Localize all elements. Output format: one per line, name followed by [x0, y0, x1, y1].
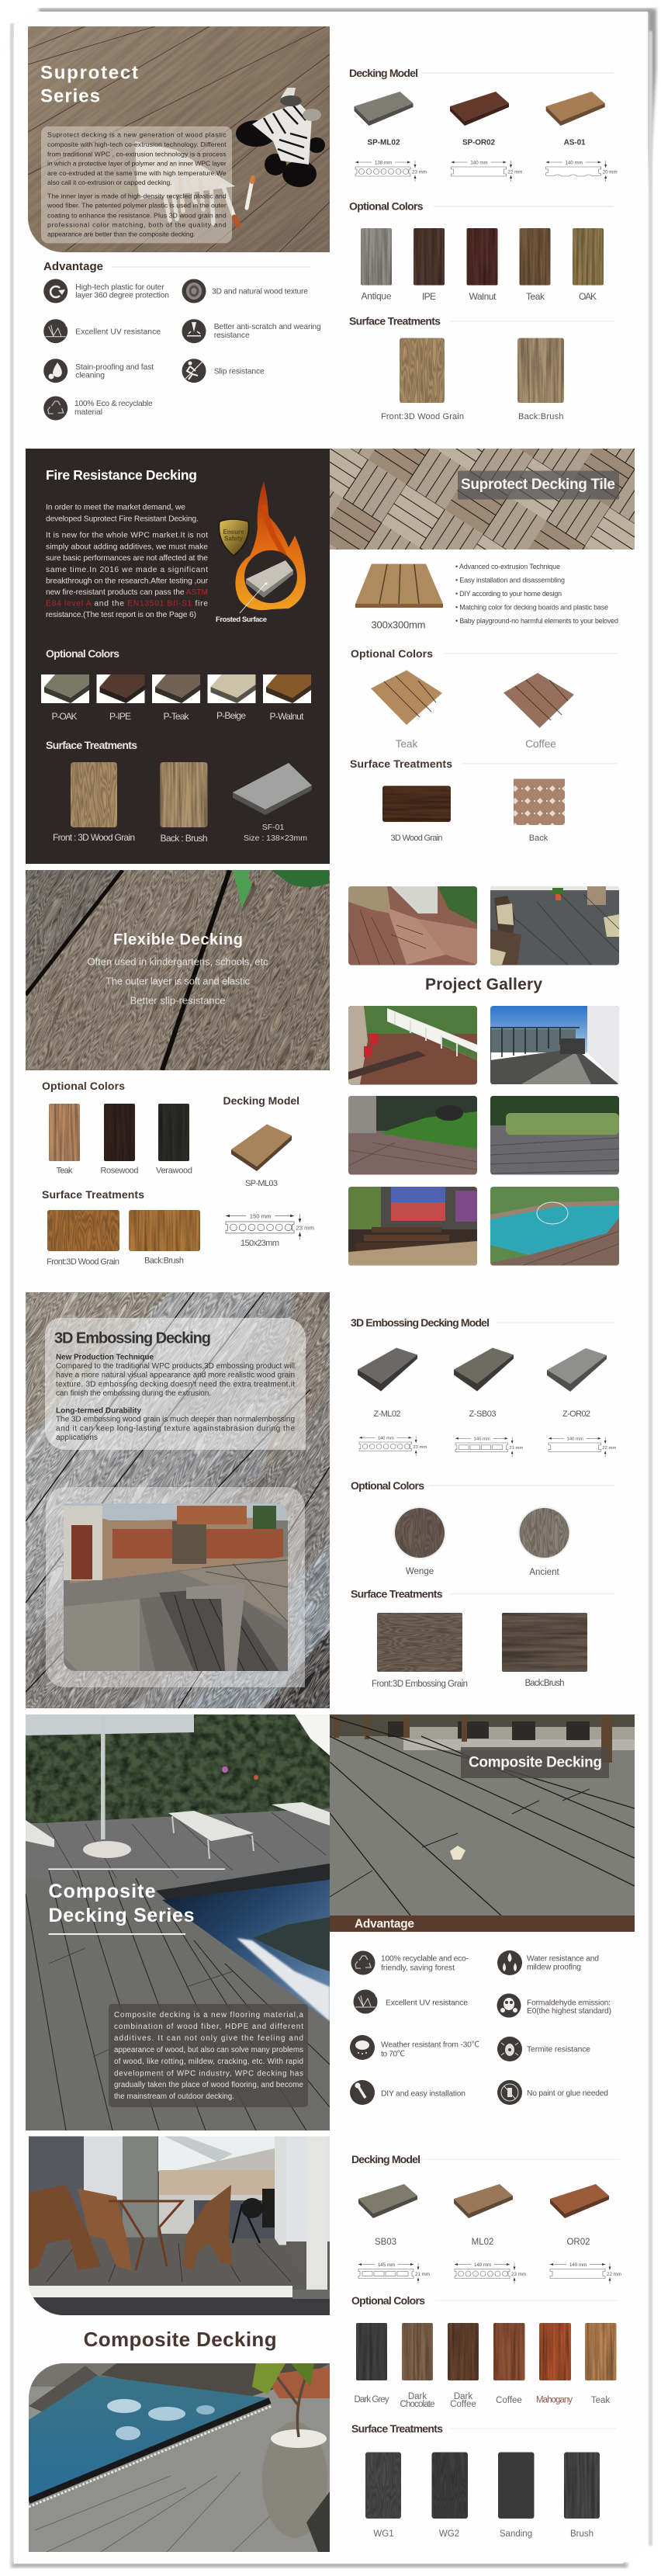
feature list: • Easy installation and disassembling	[455, 577, 565, 584]
swatch labels: Dark	[408, 2392, 427, 2401]
swatch labels: Sanding	[500, 2529, 532, 2539]
paragraph: have a more natural visual appearance and more realistic wood grain	[56, 1371, 295, 1380]
swatches	[356, 2323, 616, 2380]
advantage bar: Advantage	[355, 1917, 414, 1931]
text box: Suprotect description: coating to enhance the resistance. Plus 3D wood grain and	[47, 211, 227, 219]
item: UV resistance	[354, 1990, 468, 2013]
item: anti-scratch: resistance	[214, 331, 250, 340]
title and features	[87, 931, 268, 1006]
feature list: • Baby playground-no harmful elements to your beloved	[455, 617, 618, 625]
swatch: front embossing grain	[372, 1613, 468, 1689]
swatch: Wenge	[393, 1506, 446, 1576]
panel: suprotect decking tile	[330, 449, 635, 843]
swatch labels: WG1	[373, 2529, 394, 2539]
profile diagrams: 145 mm	[474, 1437, 490, 1441]
item: recyclable	[351, 1951, 469, 1974]
item: weather resistant: Weather resistant from -30℃	[381, 2041, 479, 2049]
item: UV resistance: Excellent UV resistance	[75, 328, 161, 337]
swatch labels: Coffee	[450, 2400, 476, 2409]
heading: Advantage: Advantage	[43, 260, 103, 273]
profile diagrams: 145 mm	[378, 2262, 395, 2268]
text box: Suprotect description: Suprotect decking is a new generation of wood plastic	[47, 131, 227, 139]
photo 7	[348, 1187, 477, 1266]
title band	[461, 1747, 609, 1778]
profile diagrams: 140 mm	[567, 1437, 583, 1441]
panel: Advantage list	[43, 260, 321, 421]
swatch: back lattice	[514, 779, 565, 843]
swatch labels	[373, 2529, 594, 2539]
swatch: front: Front : 3D Wood Grain	[53, 832, 135, 843]
description: It is new for the whole WPC market.It is not	[46, 531, 208, 540]
text box: Suprotect description: wood fiber. The patented polymer plastic is used in the outer	[47, 202, 227, 210]
paragraph	[56, 1416, 295, 1442]
panel: flexible decking photo	[26, 870, 330, 1070]
board Z-SB03	[454, 1347, 514, 1419]
swatch labels: OAK	[579, 291, 597, 302]
heading: surface treatments: Surface Treatments	[46, 739, 137, 751]
swatch: 3D wood grain	[382, 785, 451, 843]
icon: Ensure Safety shield: Safety	[224, 536, 244, 542]
title and features: Often used in kindergartens, schools, etc	[87, 956, 268, 967]
swatch front: Front:3D Wood Grain	[47, 1257, 119, 1267]
photo 4	[490, 1006, 619, 1084]
board SP-ML03	[231, 1124, 292, 1188]
swatch labels: Teak	[526, 291, 545, 302]
profile diagrams: 22 mm	[607, 2272, 621, 2277]
board AS-01	[546, 92, 605, 147]
profile diagrams: 22 mm	[602, 1446, 616, 1451]
panel: composite decking model	[351, 2153, 621, 2539]
text box: Suprotect description: composite with high-tech co-extrusion technology. Different	[47, 140, 227, 148]
paragraph: Compared to the traditional WPC products,3D embossing product will	[56, 1362, 295, 1371]
description	[46, 503, 209, 619]
profile diagram: 23 mm	[296, 1225, 314, 1232]
text box: Suprotect description: are co-extruded at the same time with high temperature.We	[47, 169, 227, 177]
swatches	[49, 1104, 189, 1161]
title: composite decking series: Decking Series	[48, 1905, 194, 1926]
panel: patio photo	[29, 2136, 330, 2315]
photo 8	[490, 1187, 622, 1266]
title band	[458, 470, 619, 500]
title: 3D Embossing Decking	[54, 1330, 211, 1347]
paragraph: can finish the embossing during the extrusion.	[56, 1389, 211, 1398]
profile diagrams: 140 mm	[566, 160, 583, 165]
profile diagram: 150x23mm	[241, 1239, 279, 1248]
paragraph: texture. 3D embossing decking doesn't need the extra treatment,it	[56, 1380, 295, 1389]
swatch labels: Mahogany	[536, 2395, 573, 2404]
item: formaldehyde: E0(the highest standard)	[527, 2007, 611, 2016]
title band: Suprotect Decking Tile	[461, 477, 615, 493]
item: high-tech plastic	[43, 279, 169, 303]
photo: deck with steps	[64, 1503, 288, 1671]
panel: surface treatments (Suprotect)	[349, 315, 614, 421]
thumbnail labels: P-Beige	[216, 710, 246, 721]
text box: Suprotect description	[41, 127, 232, 243]
swatch: Wenge: Wenge	[406, 1567, 434, 1576]
profile diagrams	[359, 1436, 616, 1457]
swatch: front 3D wood grain: Front:3D Wood Grain	[381, 412, 464, 421]
board SP-OR02: SP-OR02	[462, 138, 495, 147]
subheading: new production technique: New Production Technique	[56, 1354, 154, 1361]
panel: 3D embossing model	[351, 1316, 616, 1689]
item: recyclable	[43, 396, 153, 421]
text box: Suprotect description: The inner layer is made of high-density recycled plastic and	[47, 192, 227, 200]
item: formaldehyde	[497, 1993, 611, 2018]
photo: tile deck	[330, 449, 635, 550]
title and features: The outer layer is soft and elastic	[106, 975, 250, 987]
item: recyclable: material	[74, 408, 102, 417]
text box: Suprotect description: in which a protective layer of polymer and an inner WPC layer	[47, 160, 227, 168]
text box: combination of wood fiber, HDPE and different	[114, 2023, 303, 2031]
board SP-ML02	[354, 92, 413, 147]
translucent photo frame	[46, 1487, 305, 1687]
board SP-ML02: SP-ML02	[368, 138, 400, 147]
heading: optional colors: Optional Colors	[46, 647, 119, 660]
description: resistance.(The test report is on the Page 6)	[46, 611, 196, 619]
heading: surface treatments: Surface Treatments	[42, 1188, 144, 1201]
text box	[109, 2004, 308, 2107]
item: formaldehyde: Formaldehyde emission:	[527, 1999, 611, 2007]
feature list	[455, 563, 618, 625]
description: In order to meet the market demand, we	[46, 503, 185, 512]
item: DIY	[350, 2080, 465, 2105]
title: composite decking series	[48, 1869, 225, 1935]
text box: Suprotect description: also call it co-extrusion or capped decking.	[47, 179, 172, 186]
labels	[56, 1166, 192, 1175]
heading: optional colors: Optional Colors	[42, 1080, 125, 1092]
paragraph: and it can keep long-lasting texture againstabrasion during the	[56, 1424, 295, 1433]
board SB03: SB03	[375, 2238, 396, 2247]
item: weather resistant	[350, 2035, 479, 2060]
product: tile 300x300mm: 300x300mm	[371, 619, 425, 630]
board SF-01: SF-01	[262, 823, 284, 832]
title and features: Better slip-resistance	[130, 995, 225, 1006]
swatch back	[129, 1210, 200, 1265]
photo 5	[348, 1096, 477, 1175]
heading: optional colors: Optional Colors	[351, 647, 433, 660]
profile diagrams: 23 mm	[511, 2272, 526, 2277]
board SP-OR02	[450, 92, 509, 147]
heading: 3D Embossing Decking Model	[351, 1316, 490, 1329]
item: anti-scratch	[182, 319, 321, 343]
swatch labels: Coffee	[496, 2396, 522, 2405]
feature list: • Matching color for decking boards and plastic base	[455, 604, 608, 612]
description: sure basic performances are not affected at the	[46, 554, 208, 563]
item: high-tech plastic: High-tech plastic for outer	[75, 283, 164, 292]
photo 2	[490, 886, 619, 966]
profile diagrams: 140 mm	[474, 2262, 491, 2268]
title band: Composite Decking	[469, 1754, 602, 1771]
photo 6	[490, 1096, 619, 1175]
description: developed Suprotect Fire Resistant Decking.	[46, 515, 199, 523]
item: weather resistant: to 70℃	[381, 2051, 405, 2058]
paragraph	[56, 1362, 295, 1398]
label: Frosted Surface: Frosted Surface	[216, 615, 267, 624]
profile diagrams: 20 mm	[603, 169, 618, 175]
board AS-01: AS-01	[564, 138, 586, 147]
item: recyclable: 100% Eco & recyclable	[74, 400, 153, 408]
heading: Optional Colors	[349, 200, 424, 213]
swatches	[365, 2453, 600, 2519]
labels: Teak	[56, 1166, 73, 1175]
item: stain-proofing: cleaning	[75, 371, 105, 380]
heading: optional colors: Optional Colors	[351, 1479, 424, 1492]
panel: optional colors (Suprotect)	[349, 200, 614, 302]
thumbnail labels: P-Walnut	[270, 711, 304, 722]
board Z-OR02: Z-OR02	[562, 1409, 590, 1419]
labels: Verawood	[156, 1166, 192, 1175]
description: E84 level A and the EN13501 Bfl-S1 fire	[46, 599, 208, 608]
swatch labels: Dark	[454, 2392, 472, 2401]
panel: composite decking close-up	[330, 1714, 635, 2105]
photo 3	[348, 1006, 477, 1085]
thumbnail labels	[51, 710, 304, 722]
swatch labels: Teak	[591, 2396, 610, 2405]
board Z-SB03: Z-SB03	[469, 1409, 497, 1419]
item: high-tech plastic: layer 360 degree protection	[75, 292, 169, 300]
labels: Rosewood	[101, 1166, 138, 1175]
swatch labels: IPE	[422, 291, 436, 302]
item: UV resistance	[43, 319, 161, 343]
item: water resistance: Water resistance and	[527, 1954, 599, 1964]
heading: Surface Treatments	[349, 315, 441, 328]
swatch: back brush: Back:Brush	[524, 1679, 565, 1688]
swatch: front 3D wood grain	[381, 338, 464, 421]
profile diagrams: 21 mm	[415, 2272, 430, 2277]
panel: 3D embossing photo	[0, 1067, 611, 1932]
panel: project gallery	[348, 886, 622, 1266]
swatch labels	[362, 290, 597, 302]
text box: Suprotect description: from traditional WPC , co-extrusion technology is a process	[47, 150, 227, 158]
swatch: back brush: Back:Brush	[518, 412, 563, 421]
product: tile 300x300mm	[355, 563, 443, 630]
item: stain-proofing: Stain-proofing and fast	[75, 363, 154, 372]
item: water resistance: mildew proofing	[527, 1964, 581, 1971]
text box: development of WPC industry, WPC decking has	[114, 2069, 303, 2078]
thumbnail labels: P-IPE	[109, 711, 131, 722]
heading: Composite Decking: Composite Decking	[84, 2328, 277, 2351]
board OR02: OR02	[566, 2238, 590, 2247]
feature list: • Advanced co-extrusion Technique	[455, 563, 560, 570]
swatch labels	[354, 2392, 610, 2409]
icon: Ensure Safety shield: Ensure	[223, 529, 244, 536]
swatch: 3D wood grain: 3D Wood Grain	[391, 834, 442, 843]
item: slip resistance	[182, 359, 265, 383]
board ML02	[454, 2184, 513, 2247]
text box: Suprotect description: professional color matching, both of the quality and	[47, 220, 227, 228]
icon: flame ring with board	[235, 481, 306, 613]
swatch: Ancient	[518, 1506, 571, 1577]
swatch labels: Dark Grey	[354, 2395, 389, 2404]
profile diagrams	[355, 160, 618, 182]
paragraph: The 3D embossing wood grain is much deeper than normalembossing	[56, 1416, 295, 1424]
swatch: back brush	[502, 1613, 587, 1688]
heading: surface treatments: Surface Treatments	[351, 1588, 443, 1600]
swatch: front embossing grain: Front:3D Embossing Grain	[372, 1680, 468, 1689]
item: DIY: DIY and easy installation	[381, 2089, 465, 2099]
thumbnail labels: P-Teak	[163, 711, 189, 722]
title: Suprotect Series: Series	[40, 85, 100, 107]
item: slip resistance: Slip resistance	[214, 368, 265, 376]
board Z-OR02	[547, 1348, 607, 1419]
text box: appearance of wood, but also can solve many problems	[114, 2046, 303, 2054]
tile: Teak: Teak	[396, 738, 418, 750]
profile diagram: 150 mm	[250, 1212, 271, 1219]
item: no paint: No paint or glue needed	[527, 2089, 608, 2098]
swatch: Ancient: Ancient	[529, 1568, 559, 1577]
swatch: back lattice: Back	[529, 834, 549, 843]
heading: optional colors: Optional Colors	[351, 2294, 425, 2307]
item: water resistance	[497, 1950, 599, 1975]
item: wood texture	[182, 279, 308, 303]
profile diagrams: 140 mm	[378, 1436, 394, 1441]
heading: Decking Model	[351, 2153, 420, 2165]
board SP-ML03: SP-ML03	[245, 1179, 278, 1188]
board SF-01	[233, 763, 312, 843]
text box: the mainstream of outdoor decking.	[114, 2092, 234, 2101]
icon: Ensure Safety shield	[219, 519, 249, 556]
profile diagrams: 23 mm	[412, 169, 427, 175]
title and features: Flexible Decking	[113, 931, 243, 948]
thumbnail labels: P-OAK	[51, 711, 78, 722]
swatch: back brush	[517, 338, 564, 421]
item: no paint	[497, 2080, 608, 2105]
tile: Coffee	[504, 673, 574, 750]
subheading: long-termed durability: Long-termed Durability	[56, 1406, 141, 1416]
profile diagrams: 22 mm	[507, 169, 522, 175]
color thumbnails	[41, 674, 311, 703]
swatch labels: Chocolate	[400, 2400, 434, 2409]
heading: surface treatments: Surface Treatments	[351, 2422, 443, 2435]
feature list: • DIY according to your home design	[455, 590, 562, 598]
board OR02	[550, 2184, 609, 2247]
heading: Project Gallery	[425, 976, 542, 993]
profile diagrams: 23 mm	[413, 1445, 427, 1450]
board SF-01: Size : 138×23mm	[244, 834, 307, 843]
paragraph: applications	[56, 1434, 98, 1442]
title: Suprotect Series	[40, 62, 138, 107]
profile diagram	[226, 1212, 314, 1248]
panel: pool photo	[29, 2363, 330, 2552]
swatch labels: Walnut	[469, 291, 497, 302]
board SB03	[358, 2184, 417, 2247]
description: simply about adding additives, we must make	[46, 543, 208, 551]
tile: Teak	[371, 671, 442, 750]
photo 1	[348, 886, 477, 966]
swatches	[361, 228, 604, 286]
text box: Composite decking is a new flooring material,a	[114, 2011, 304, 2020]
item: UV resistance: Excellent UV resistance	[386, 1999, 468, 2007]
title: Fire Resistance Decking	[46, 467, 197, 483]
advantage bar	[330, 1916, 635, 1932]
item: anti-scratch: Better anti-scratch and wearing	[214, 323, 321, 331]
swatch labels: Brush	[570, 2529, 594, 2539]
swatch: back: Back : Brush	[160, 833, 208, 844]
item: wood texture: 3D and natural wood texture	[212, 287, 308, 296]
swatch front	[47, 1210, 119, 1267]
profile diagrams: 140 mm	[470, 160, 488, 165]
text box: additives. It can not only give the feeling and	[114, 2034, 303, 2043]
swatch labels: Antique	[362, 290, 392, 301]
item: stain-proofing	[43, 359, 154, 383]
tile: Coffee: Coffee	[525, 738, 556, 750]
panel: flexible options	[42, 1080, 314, 1267]
board ML02: ML02	[472, 2238, 493, 2247]
board Z-ML02	[358, 1347, 417, 1419]
profile diagrams: 138 mm	[375, 160, 392, 165]
panel: suprotect series photo	[28, 26, 330, 252]
text box: Suprotect description: appearance are better than the composite decking.	[47, 231, 196, 238]
board Z-ML02: Z-ML02	[374, 1409, 400, 1419]
profile diagrams	[358, 2262, 621, 2283]
profile diagrams: 21 mm	[509, 1446, 523, 1451]
profile diagrams: 140 mm	[569, 2262, 587, 2268]
panel: fire resistance decking	[26, 449, 330, 864]
swatch: front	[53, 762, 135, 843]
swatch labels: WG2	[439, 2529, 459, 2539]
swatch: back	[160, 762, 208, 844]
text box: of wood, like rotting, mildew, cracking, etc. With rapid	[114, 2058, 303, 2066]
text box: gradually taken the place of wood flooring, and become	[114, 2081, 304, 2089]
description: new fire-resistant products can pass the ASTM	[46, 588, 208, 597]
title: composite decking series: Composite	[48, 1881, 156, 1902]
item: recyclable: 100% recyclable and eco-	[381, 1954, 469, 1964]
panel: composite decking series photo	[26, 1714, 330, 2130]
description: breakthrough on the research.After testing ,our	[46, 577, 209, 585]
heading: surface treatments: Surface Treatments	[350, 758, 452, 770]
panel: decking model (Suprotect)	[349, 67, 618, 182]
item: termite	[497, 2037, 590, 2061]
item: recyclable: friendly, saving forest	[381, 1964, 455, 1973]
title: Suprotect Series: Suprotect	[40, 62, 138, 84]
heading: Decking Model	[349, 67, 418, 79]
heading: decking model: Decking Model	[223, 1094, 299, 1107]
item: termite: Termite resistance	[527, 2046, 590, 2054]
swatch back: Back:Brush	[144, 1256, 184, 1265]
description: same time.In 2016 we made a significant	[46, 566, 208, 574]
translucent text box	[45, 1318, 306, 1450]
